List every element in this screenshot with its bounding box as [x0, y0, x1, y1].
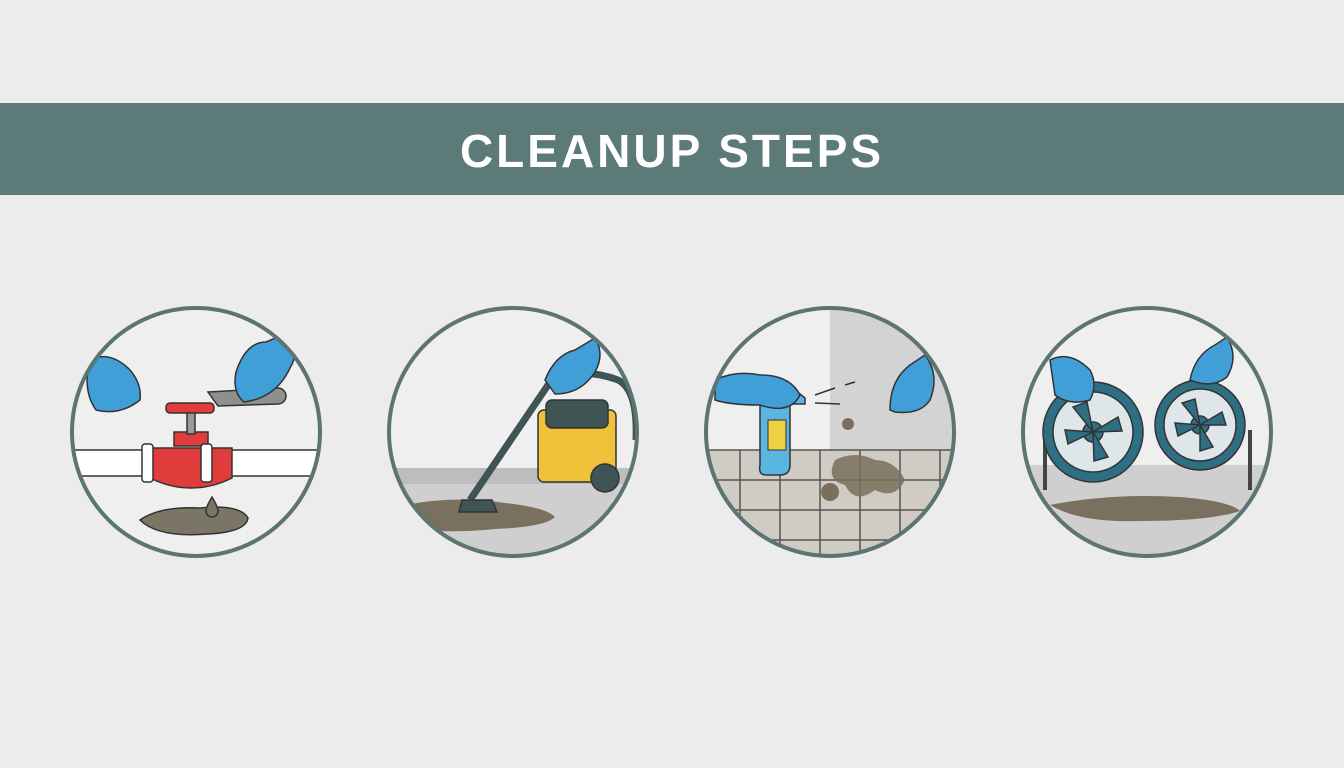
title banner — [0, 103, 1344, 195]
puddle — [405, 499, 555, 531]
panel: disinfect surfaces — [704, 306, 956, 558]
hose and wand — [470, 374, 636, 500]
valve — [142, 403, 232, 488]
tiles — [710, 450, 950, 554]
hand — [545, 338, 600, 394]
vacuum body — [538, 410, 616, 482]
wrench — [208, 388, 286, 406]
title banner: CLEANUP STEPS — [460, 125, 884, 177]
spray bottle — [760, 405, 790, 475]
hands — [1050, 357, 1094, 402]
puddle — [140, 507, 248, 535]
panel: stop the leak — [60, 308, 340, 556]
mold stains — [832, 455, 905, 496]
hands — [87, 357, 140, 412]
panel: vacuum water — [380, 308, 650, 568]
fans — [1043, 380, 1245, 482]
fan stands — [1045, 430, 1250, 490]
panel: dry with fans — [1020, 308, 1280, 565]
pipe — [60, 450, 340, 476]
floor — [402, 484, 624, 554]
hands — [715, 373, 800, 408]
